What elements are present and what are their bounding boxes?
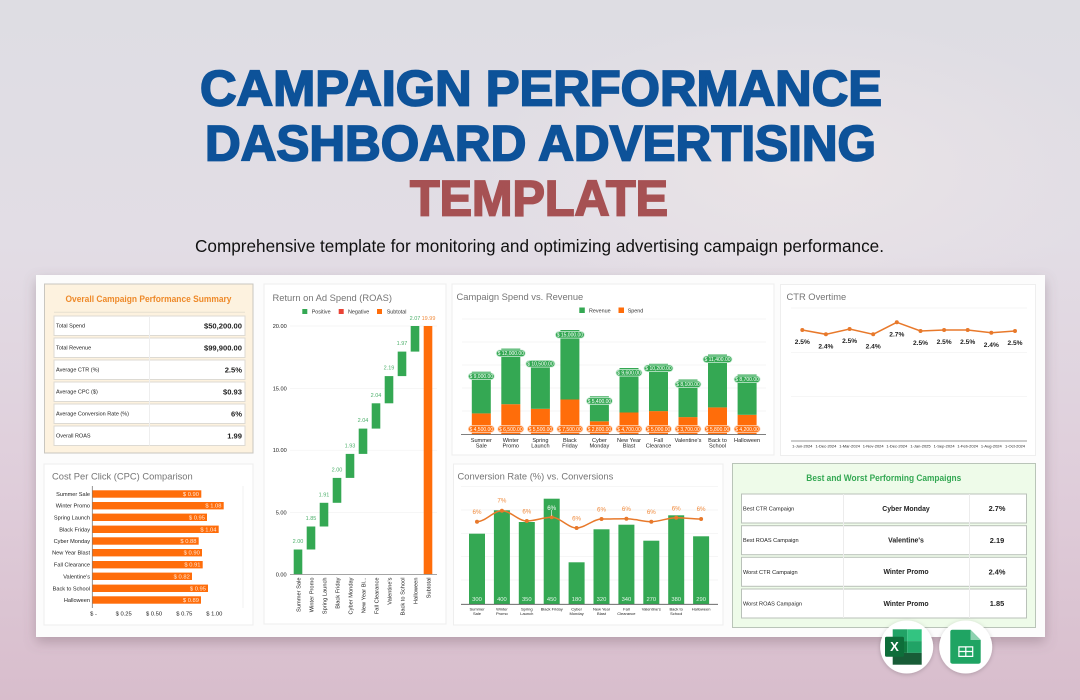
- combo chart: [461, 487, 718, 616]
- ROAS waterfall chart: [273, 316, 437, 615]
- CTR heading: CTR Overtime: [786, 292, 846, 302]
- CPC bar chart: $ 1.00: [206, 612, 222, 618]
- spend data labels: $ 6,500.00: [499, 427, 523, 433]
- combo chart: Winter: [496, 606, 508, 611]
- CTR line chart: 1-Oct-2024: [1005, 444, 1026, 448]
- summary rows: $50,200.00: [204, 321, 242, 330]
- summary rows: 2.5%: [225, 365, 242, 374]
- revenue data labels: $ 8,700.00: [735, 377, 759, 383]
- summary rows: Average CPC ($): [56, 389, 98, 395]
- CPC bar chart: Fall Clearance: [54, 563, 90, 569]
- combo chart: 6%: [572, 515, 582, 522]
- CTR line chart: 1-Jan-2025: [910, 444, 931, 448]
- summary rows: $99,900.00: [204, 343, 242, 352]
- ROAS waterfall chart: Black Friday: [335, 577, 341, 609]
- CTR line chart: 2.4%: [818, 344, 834, 350]
- spend data labels: $ 7,500.00: [558, 427, 582, 433]
- spend data labels: [468, 426, 760, 433]
- panel: spend vs revenue: [452, 284, 774, 455]
- combo chart: Clearance: [617, 611, 636, 616]
- revenue data labels: $ 12,000.00: [498, 351, 524, 357]
- combo chart: Launch: [520, 611, 533, 616]
- spend vs revenue categories: New Year: [617, 438, 641, 444]
- combo chart: School: [670, 611, 682, 616]
- ROAS waterfall chart: 20.00: [273, 324, 287, 330]
- spend vs revenue categories: Launch: [531, 443, 550, 449]
- CPC bar chart: Winter Promo: [56, 504, 90, 510]
- combo chart: 340: [622, 597, 631, 603]
- title: TEMPLATE: [410, 170, 668, 226]
- combo chart: Summer: [469, 606, 485, 611]
- CTR line chart: [791, 308, 1027, 448]
- combo chart: Black Friday: [541, 606, 563, 611]
- CPC bar chart: $ -: [90, 612, 97, 618]
- dashboard board: [36, 275, 1045, 637]
- spend vs revenue categories: Valentine's: [675, 438, 702, 444]
- combo chart: 6%: [473, 509, 482, 516]
- spend vs revenue categories: Monday: [589, 443, 610, 449]
- combo chart: 6%: [697, 506, 706, 513]
- panel: best and worst campaigns: [732, 464, 1036, 628]
- CPC bar chart: $ 0.90: [183, 492, 199, 498]
- ROAS waterfall chart: 1.93: [345, 443, 355, 449]
- combo chart: 400: [497, 597, 507, 603]
- ROAS waterfall chart: 1.85: [306, 516, 316, 522]
- CPC bar chart: New Year Blast: [52, 551, 90, 557]
- ROAS waterfall chart: 2.04: [371, 393, 381, 399]
- best and worst rows: 2.19: [990, 536, 1004, 545]
- revenue data labels: [468, 332, 760, 405]
- combo chart: 6%: [547, 505, 557, 512]
- combo chart: 6%: [522, 509, 532, 516]
- spend vs revenue legend: Revenue: [589, 308, 611, 314]
- summary rows: 6%: [231, 409, 242, 418]
- revenue data labels: $ 10,500.00: [527, 362, 554, 368]
- CTR line chart: 2.7%: [889, 332, 904, 338]
- ROAS waterfall chart: 2.00: [293, 539, 303, 545]
- CPC bar chart: $ 0.91: [184, 563, 200, 569]
- combo chart: Fall: [623, 606, 630, 611]
- best and worst rows: 1.85: [990, 599, 1004, 608]
- ROAS waterfall chart: Subtotal: [426, 578, 432, 598]
- CTR line chart: 1-Dec-2024: [815, 444, 837, 448]
- CPC bar chart: $ 0.89: [183, 598, 199, 604]
- combo chart: Blast: [597, 611, 607, 616]
- title: CAMPAIGN PERFORMANCE: [200, 60, 882, 116]
- CPC bar chart: Halloween: [64, 598, 90, 604]
- CPC bar chart: $ 0.95: [190, 586, 206, 592]
- spend data labels: $ 4,700.00: [617, 427, 641, 433]
- CTR line chart: 1-Feb-2024: [957, 444, 979, 448]
- best and worst rows: Worst ROAS Campaign: [743, 602, 802, 608]
- ROAS legend: Negative: [348, 310, 369, 316]
- CPC bar chart: Summer Sale: [56, 492, 90, 498]
- spend vs revenue categories: Blast: [623, 443, 636, 449]
- spend data labels: $ 4,500.00: [469, 427, 493, 433]
- CTR line chart: 2.5%: [842, 338, 857, 345]
- CTR line chart: 2.5%: [960, 339, 975, 346]
- spend vs revenue categories: Winter: [503, 438, 519, 444]
- CTR line chart: 2.5%: [913, 340, 928, 347]
- CTR line chart: 1-Dec-2024: [886, 444, 908, 448]
- summary rows: Total Revenue: [56, 345, 91, 351]
- revenue data labels: $ 15,000.00: [557, 333, 583, 339]
- combo chart: 300: [472, 597, 482, 603]
- spend vs revenue categories: Cyber: [592, 438, 607, 444]
- best and worst rows: Winter Promo: [883, 569, 929, 576]
- CPC bar chart: Spring Launch: [54, 515, 90, 521]
- spend vs revenue categories: Fall: [654, 438, 663, 444]
- best and worst heading: Best and Worst Performing Campaigns: [806, 473, 961, 483]
- combo chart: Valentine's: [642, 606, 661, 611]
- spend data labels: $ 3,700.00: [676, 427, 700, 433]
- CTR line chart: 2.5%: [795, 339, 810, 346]
- CPC bar chart: $ 0.88: [180, 539, 196, 545]
- spend vs revenue categories: Spring: [532, 438, 548, 444]
- CTR line chart: 1-Aug-2024: [981, 444, 1003, 448]
- CTR line chart: 2.5%: [937, 339, 952, 346]
- combo chart: 7%: [497, 498, 507, 505]
- best and worst rows: Best ROAS Campaign: [743, 538, 799, 544]
- spend vs revenue categories: Black: [563, 438, 577, 444]
- spend vs revenue categories: Clearance: [646, 443, 671, 449]
- ROAS heading: Return on Ad Spend (ROAS): [272, 293, 392, 303]
- panel: conversion rate vs conversions: [454, 464, 723, 625]
- CTR line chart: 2.4%: [984, 342, 999, 349]
- CPC bar chart: Back to School: [53, 586, 90, 592]
- combo chart: Spring: [521, 606, 533, 611]
- spend vs revenue categories: [471, 438, 760, 449]
- ROAS legend: Subtotal: [387, 310, 406, 316]
- icon: Google Sheets: [939, 620, 992, 674]
- ROAS waterfall chart: New Year Bl...: [361, 577, 367, 613]
- spend vs revenue categories: School: [709, 443, 726, 449]
- summary rows: Average Conversion Rate (%): [56, 411, 129, 417]
- stacked bar chart: [461, 319, 766, 449]
- ROAS waterfall chart: Valentine's: [387, 577, 393, 605]
- spend vs revenue categories: Promo: [503, 443, 519, 449]
- best and worst rows: 2.7%: [989, 504, 1006, 513]
- summary heading: Overall Campaign Performance Summary: [66, 294, 232, 304]
- CTR line chart: 1-Nov-2024: [863, 444, 884, 448]
- summary rows: $0.93: [223, 387, 242, 396]
- combo chart: New Year: [593, 606, 611, 611]
- best and worst rows: [742, 494, 1026, 618]
- combo chart: 450: [547, 597, 557, 603]
- summary rows: [54, 312, 245, 446]
- combo chart: Cyber: [571, 606, 583, 611]
- ROAS waterfall chart: 15.00: [273, 386, 287, 392]
- combo chart: Back to: [670, 606, 684, 611]
- combo chart: 6%: [597, 506, 606, 513]
- ROAS waterfall chart: 10.00: [273, 448, 287, 454]
- CPC bar chart: Valentine's: [63, 574, 90, 580]
- ROAS waterfall chart: Winter Promo: [309, 578, 315, 612]
- CTR line chart: 1-Mar-2024: [839, 444, 861, 448]
- spend vs revenue categories: Friday: [562, 443, 578, 449]
- spend vs revenue categories: Halloween: [734, 438, 760, 444]
- ROAS waterfall chart: 1.91: [319, 492, 329, 498]
- best and worst rows: Best CTR Campaign: [743, 506, 794, 512]
- best and worst rows: 2.4%: [989, 567, 1006, 576]
- panel: CPC comparison: [44, 464, 253, 625]
- combo chart: 180: [572, 597, 581, 603]
- CTR line chart: 1-Jun-2024: [792, 444, 813, 448]
- combo chart: Sale: [473, 611, 482, 616]
- CPC bar chart: $ 0.25: [116, 612, 132, 618]
- combo chart: 6%: [622, 506, 631, 513]
- combo chart: 270: [646, 597, 656, 603]
- ROAS legend: Positive: [312, 310, 331, 316]
- spend vs revenue heading: Campaign Spend vs. Revenue: [456, 292, 583, 302]
- panel: ROAS waterfall: [264, 284, 446, 624]
- combo chart: Monday: [569, 611, 584, 616]
- combo chart: 320: [597, 597, 606, 603]
- CPC bar chart: Cyber Monday: [54, 539, 90, 545]
- ROAS waterfall chart: 2.04: [358, 418, 368, 424]
- CPC bar chart: $ 0.75: [176, 612, 192, 618]
- best and worst rows: Cyber Monday: [882, 506, 930, 513]
- CPC bar chart: $ 1.04: [200, 527, 217, 533]
- combo chart: Promo: [496, 611, 509, 616]
- ROAS waterfall chart: 0.00: [276, 572, 287, 578]
- summary rows: 1.99: [227, 431, 242, 440]
- CPC bar chart: $ 0.95: [189, 515, 205, 521]
- best and worst rows: Worst CTR Campaign: [743, 570, 798, 576]
- CPC bar chart: $ 1.08: [205, 504, 222, 510]
- ROAS waterfall chart: Fall Clearance: [374, 578, 380, 614]
- CTR line chart: 1-Sep-2024: [934, 444, 955, 448]
- spend data labels: $ 4,200.00: [735, 427, 759, 433]
- title: [200, 60, 882, 226]
- ROAS waterfall chart: Back to School: [400, 578, 406, 615]
- ROAS waterfall chart: Summer Sale: [296, 578, 302, 612]
- best and worst rows: Valentine's: [888, 538, 924, 545]
- ROAS legend: [302, 309, 406, 316]
- combo chart: Halloween: [692, 606, 710, 611]
- summary rows: Average CTR (%): [56, 367, 99, 373]
- ROAS waterfall chart: 2.07: [410, 316, 420, 322]
- panel: overall summary: [44, 284, 253, 453]
- revenue data labels: $ 11,400.00: [704, 357, 731, 363]
- CPC bar chart: Black Friday: [59, 527, 90, 533]
- spend data labels: $ 2,800.00: [588, 427, 611, 433]
- spend data labels: $ 5,500.00: [529, 427, 552, 433]
- CPC bar chart: $ 0.50: [146, 612, 162, 618]
- icon: Excel: X: [890, 639, 899, 654]
- ROAS waterfall chart: Spring Launch: [322, 578, 328, 614]
- spend vs revenue categories: Back to: [708, 438, 727, 444]
- panel: CTR overtime: [780, 284, 1036, 456]
- spend data labels: $ 5,000.00: [647, 427, 671, 433]
- spend vs revenue categories: Summer: [471, 438, 492, 444]
- revenue data labels: $ 9,000.00: [469, 374, 493, 380]
- combo chart: 290: [696, 597, 706, 603]
- CPC heading: Cost Per Click (CPC) Comparison: [52, 472, 193, 482]
- CTR line chart: 2.4%: [866, 344, 881, 350]
- CPC bar chart: [52, 486, 243, 618]
- revenue data labels: $ 9,600.00: [617, 371, 641, 377]
- CTR line chart: 2.5%: [1007, 340, 1023, 347]
- CPC bar chart: $ 0.82: [174, 574, 190, 580]
- subtitle: Comprehensive template for monitoring and optimizing advertising campaign performance.: [195, 236, 884, 256]
- combo chart: 350: [522, 597, 532, 603]
- conversion heading: Conversion Rate (%) vs. Conversions: [458, 472, 614, 482]
- revenue data labels: $ 10,200.00: [645, 366, 672, 372]
- ROAS waterfall chart: 2.00: [332, 467, 342, 473]
- combo chart: 6%: [647, 509, 656, 516]
- revenue data labels: $ 5,400.00: [588, 399, 611, 405]
- CPC bar chart: $ 0.90: [184, 551, 200, 557]
- ROAS waterfall chart: Halloween: [413, 578, 419, 604]
- ROAS waterfall chart: 19.99: [422, 316, 435, 322]
- combo chart: 6%: [672, 505, 681, 512]
- spend vs revenue legend: Spend: [628, 308, 643, 314]
- ROAS waterfall chart: Cyber Monday: [348, 577, 354, 614]
- ROAS waterfall chart: 1.97: [397, 341, 407, 347]
- summary rows: Total Spend: [56, 323, 85, 329]
- best and worst rows: Winter Promo: [883, 601, 929, 608]
- title: DASHBOARD ADVERTISING: [205, 116, 876, 172]
- icon: Excel: [880, 620, 933, 674]
- combo chart: 380: [671, 597, 681, 603]
- spend vs revenue legend: [579, 308, 643, 314]
- summary rows: Overall ROAS: [56, 433, 91, 439]
- spend data labels: $ 5,800.00: [706, 427, 730, 433]
- ROAS waterfall chart: 2.19: [384, 366, 394, 372]
- ROAS waterfall chart: 5.00: [276, 510, 287, 516]
- revenue data labels: $ 8,100.00: [676, 382, 700, 388]
- spend vs revenue categories: Sale: [476, 443, 487, 449]
